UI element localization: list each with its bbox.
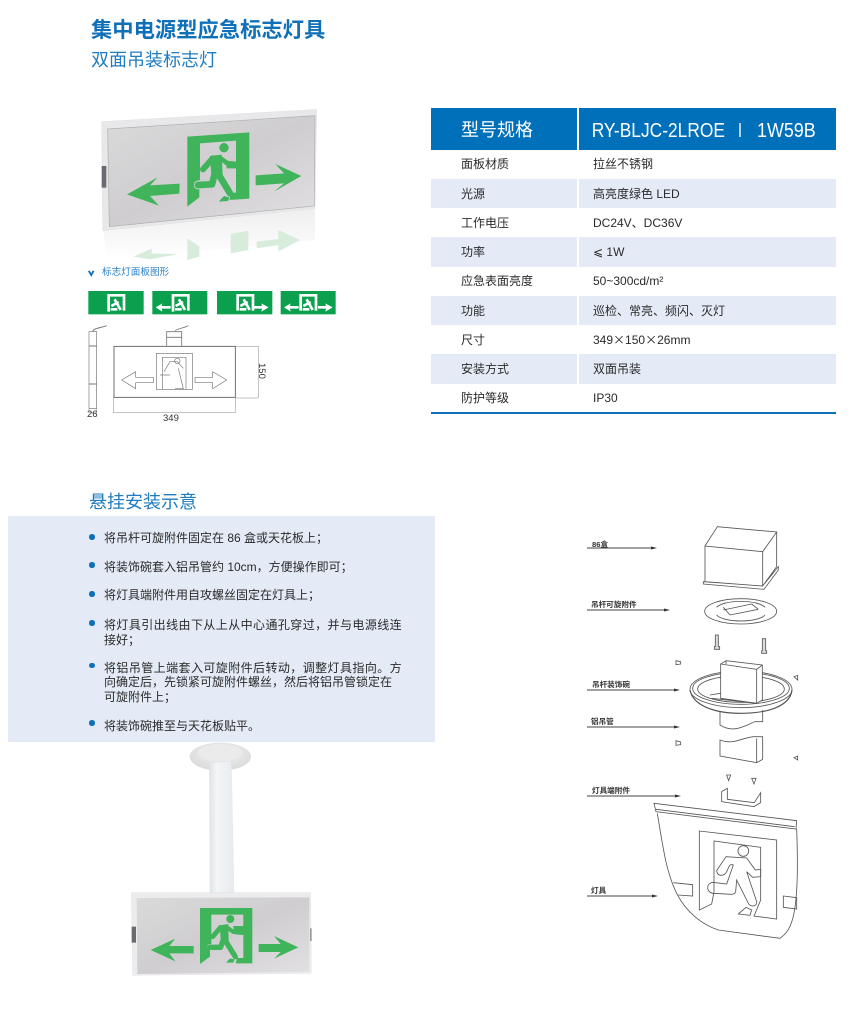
table rows: 功能 xyxy=(461,304,485,318)
screws xyxy=(676,635,798,760)
step 2: 将装饰碗套入铝吊管约 10cm，方便操作即可； xyxy=(104,560,353,574)
table rows xyxy=(461,157,725,405)
end bracket xyxy=(722,775,761,807)
table rows: DC24V、DC36V xyxy=(593,216,682,230)
sign body xyxy=(131,893,312,975)
table rows: 拉丝不锈钢 xyxy=(593,157,653,171)
sub-heading chevron and label: 标志灯面板图形 xyxy=(102,267,169,278)
table rows: IP30 xyxy=(593,391,618,405)
label: decorative bowl: 吊杆装饰碗 xyxy=(592,680,630,689)
step 4: 接好； xyxy=(104,632,140,646)
table rows: 高亮度绿色 LED xyxy=(593,187,680,201)
table rows: 尺寸 xyxy=(461,333,485,347)
ceiling bowl xyxy=(190,743,251,771)
table rows: 双面吊装 xyxy=(593,362,641,376)
table rows: 功率 xyxy=(461,245,485,259)
callout arrowheads xyxy=(651,546,681,898)
table rows: 应急表面亮度 xyxy=(461,274,533,288)
table rows: 面板材质 xyxy=(461,157,509,171)
section heading: 悬挂安装示意 xyxy=(89,492,197,512)
pipe xyxy=(209,761,234,893)
table rows: 防护等级 xyxy=(461,391,509,405)
dimension drawing: 26 xyxy=(87,409,98,420)
step 5 xyxy=(89,660,402,704)
step 6: 将装饰碗推至与天花板贴平。 xyxy=(104,719,260,733)
callout lines xyxy=(587,548,679,896)
step 5: 向确定后，先锁紧可旋附件螺丝，然后将铝吊管锁定在 xyxy=(104,675,392,689)
table bottom rule xyxy=(431,412,836,414)
table header xyxy=(431,108,836,150)
step 3: 将灯具端附件用自攻螺丝固定在灯具上； xyxy=(104,588,320,602)
installation steps panel xyxy=(8,516,435,742)
table rows: 工作电压 xyxy=(461,216,509,230)
table header: I xyxy=(738,120,742,142)
label: end bracket: 灯具端附件 xyxy=(592,786,630,795)
step 4 xyxy=(89,618,402,646)
decorative bowl xyxy=(690,661,792,729)
aluminium pipe section xyxy=(720,737,763,763)
dimension drawing: 150 xyxy=(256,363,267,379)
dimension drawing: 349 xyxy=(163,413,179,424)
table rows: 349×150×26mm xyxy=(593,331,690,348)
spec table xyxy=(431,108,836,414)
row bands xyxy=(431,179,836,384)
label: rotating bracket: 吊杆可旋附件 xyxy=(591,600,637,609)
title: 集中电源型应急标志灯具 xyxy=(91,18,325,42)
lamp outline xyxy=(654,803,797,938)
label: lamp: 灯具 xyxy=(591,886,606,895)
table rows: ⩽ 1W xyxy=(593,245,624,259)
table header: 1W59B xyxy=(757,120,816,142)
rotating bracket xyxy=(705,599,777,624)
label: 86 box: 86盒 xyxy=(592,540,608,549)
step 5: 将铝吊管上端套入可旋附件后转动，调整灯具指向。方 xyxy=(104,660,402,674)
table rows: 安装方式 xyxy=(461,362,509,376)
step 1: 将吊杆可旋附件固定在 86 盒或天花板上； xyxy=(104,531,328,545)
table header: 型号规格 xyxy=(461,120,533,140)
subtitle: 双面吊装标志灯 xyxy=(91,50,217,70)
86 box xyxy=(703,527,778,589)
table header: RY-BLJC-2LROE xyxy=(592,120,725,142)
table rows: 光源 xyxy=(461,187,485,201)
table rows: 巡检、常亮、频闪、灭灯 xyxy=(593,304,725,318)
step 4: 将灯具引出线由下从上从中心通孔穿过，并与电源线连 xyxy=(104,618,402,632)
step 5: 可旋附件上； xyxy=(104,690,176,704)
table rows: 50~300cd/m² xyxy=(593,274,663,288)
label: aluminium pipe: 铝吊管 xyxy=(591,717,614,726)
